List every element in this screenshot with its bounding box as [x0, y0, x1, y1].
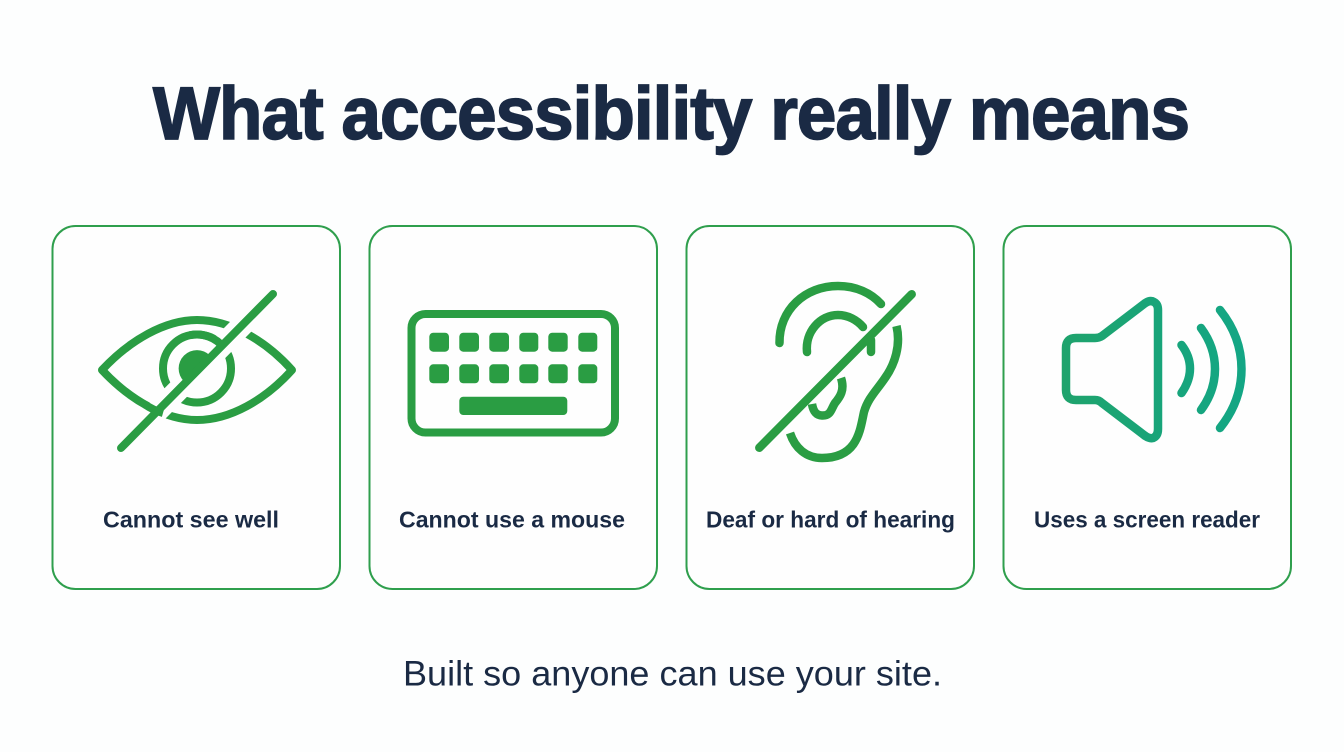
- label: Cannot use a mouse: [399, 506, 625, 532]
- label: Cannot see well: [103, 506, 279, 532]
- icon: crossed-out eye: [102, 294, 292, 448]
- title: What accessibility really means: [153, 72, 1190, 155]
- panel: cannot see well: [52, 226, 340, 589]
- icon: keyboard: [412, 314, 615, 432]
- panel: uses a screen reader: [1004, 226, 1291, 589]
- label: Uses a screen reader: [1034, 506, 1260, 532]
- icon: crossed-out ear: [759, 286, 912, 458]
- icon: speaker with sound waves: [1066, 301, 1242, 438]
- footer tagline: Built so anyone can use your site.: [403, 654, 942, 694]
- panel: cannot use a mouse: [370, 226, 657, 589]
- label: Deaf or hard of hearing: [706, 506, 955, 532]
- panel: deaf or hard of hearing: [686, 226, 974, 589]
